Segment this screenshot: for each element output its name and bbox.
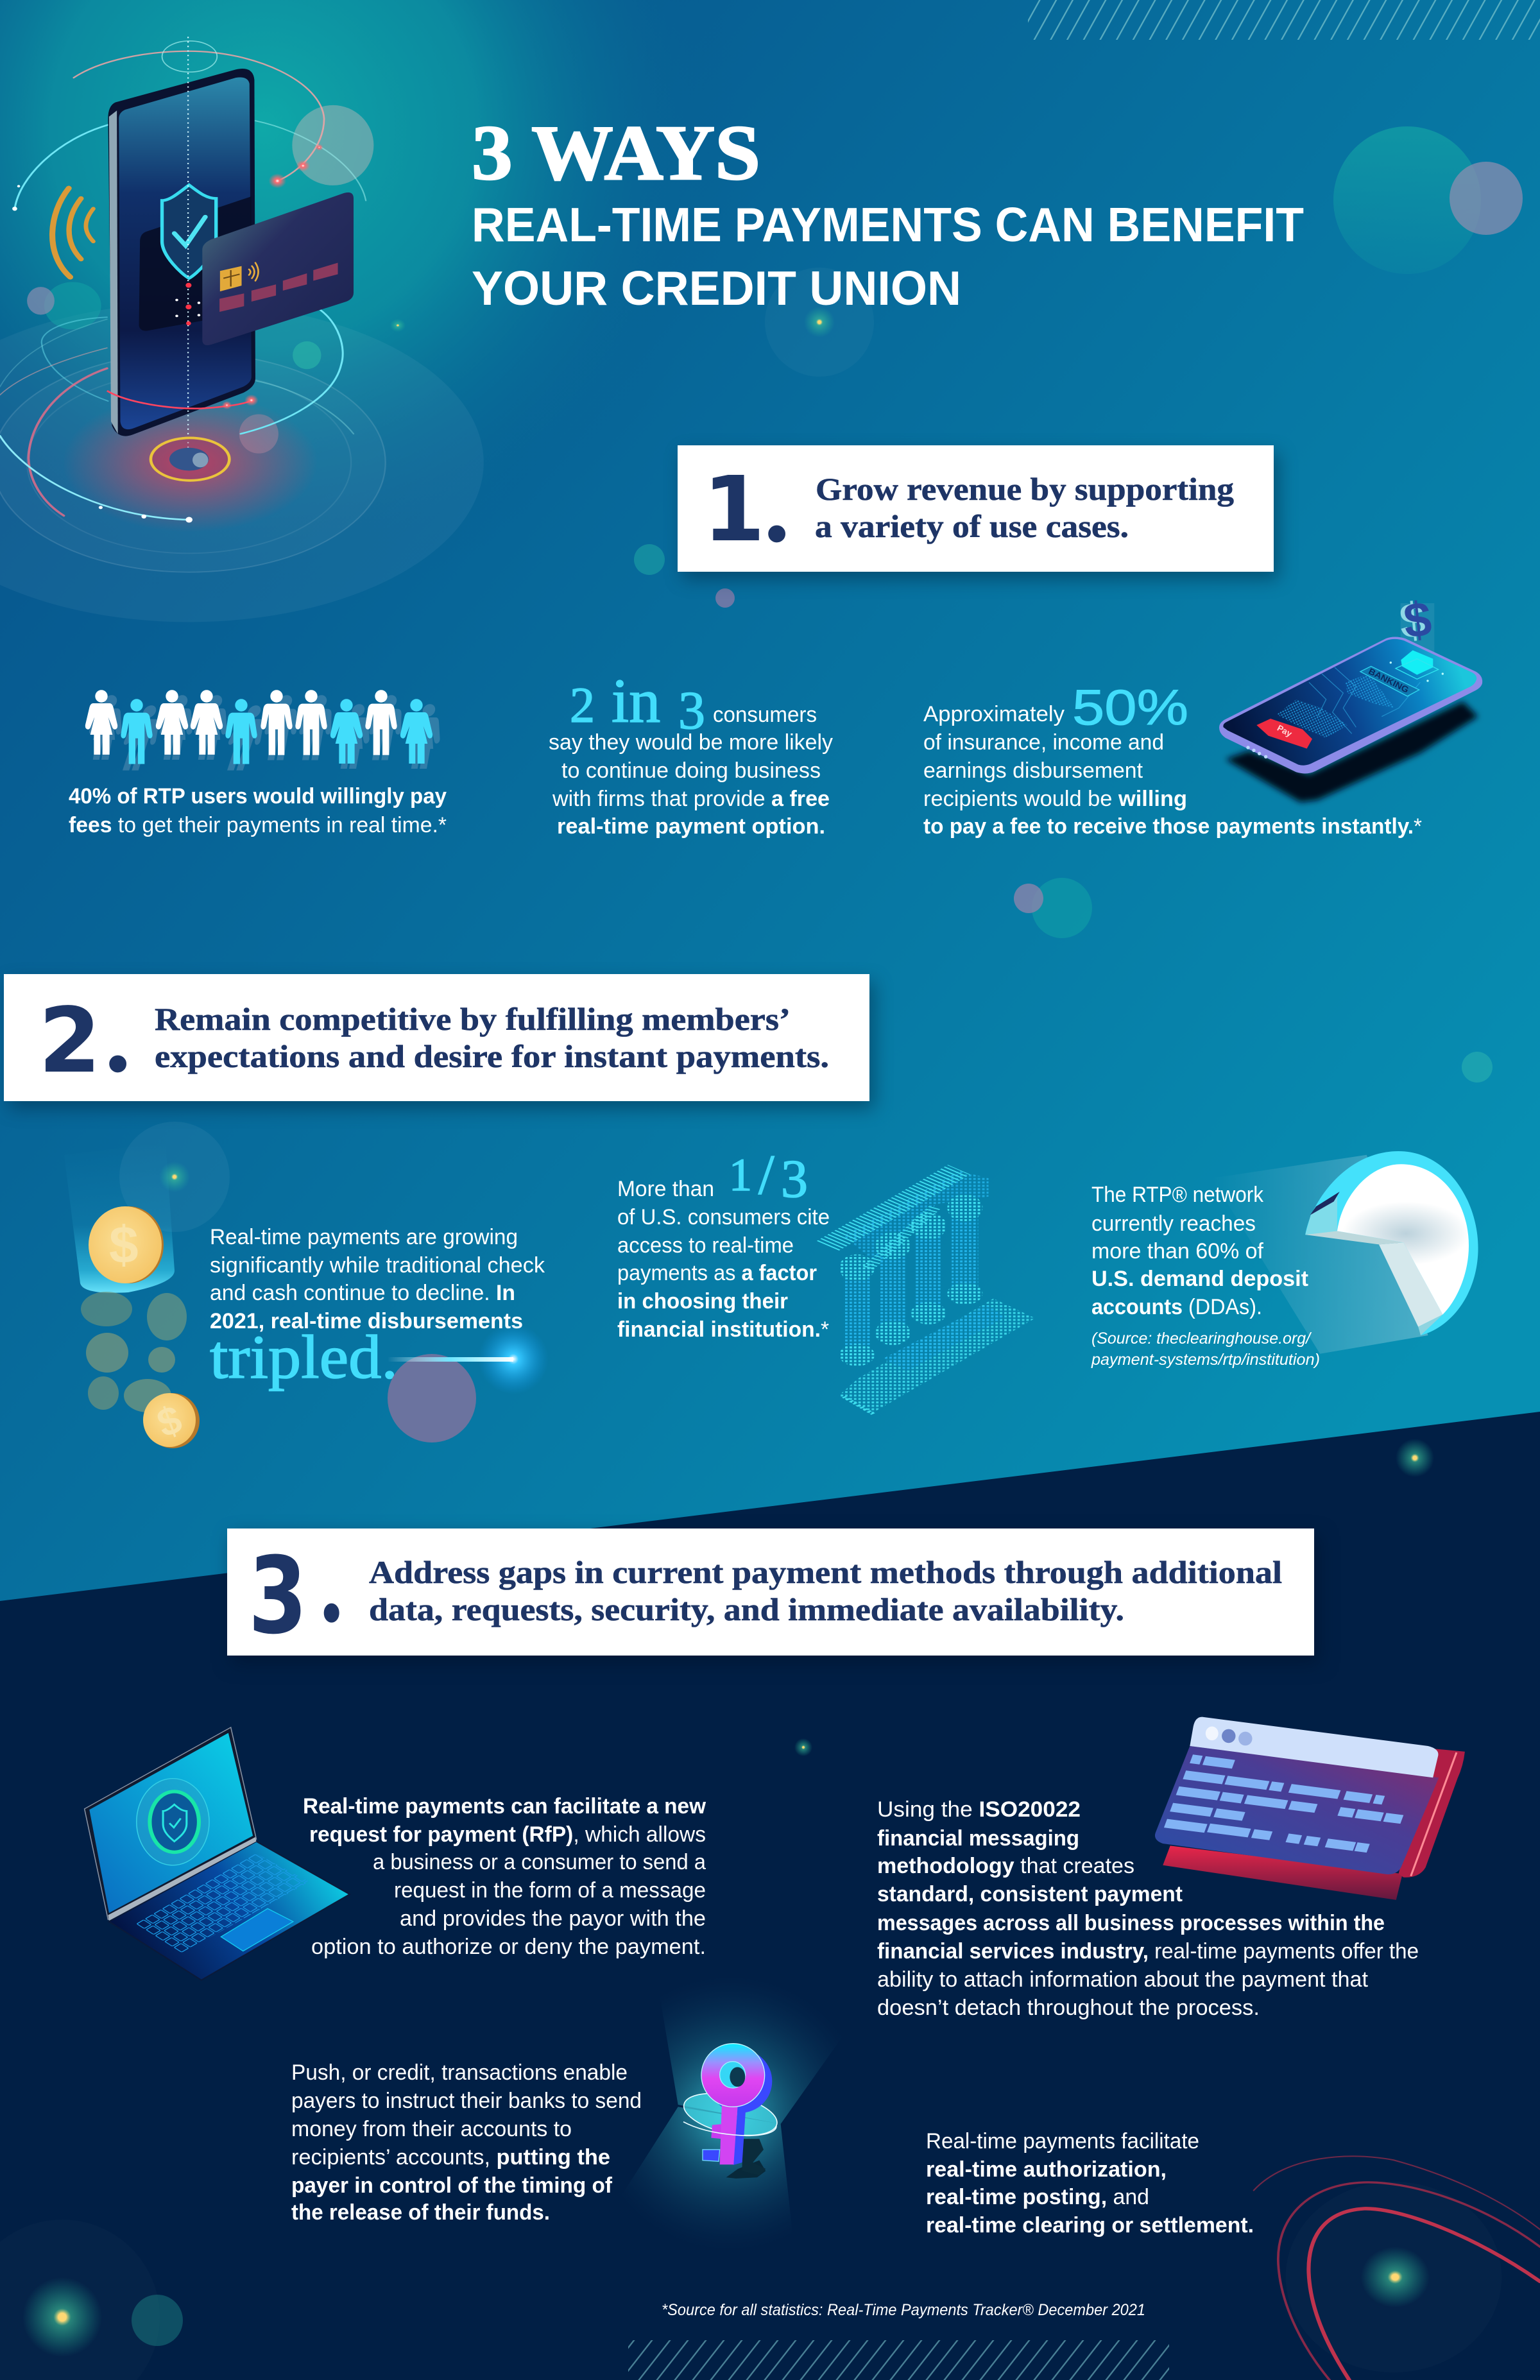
- text: real-time authorization: [926, 2129, 1254, 2238]
- bokeh: glow on dark band: [1396, 1439, 1434, 1477]
- number 2: .: [105, 977, 131, 1094]
- text: request for payment: Real-time payments can facilitate a new: [303, 1794, 706, 1819]
- text: push credit transactions: payer in control of the timing of: [291, 2173, 613, 2198]
- illustration: 3D pie chart showing 60 percent: [1212, 1151, 1478, 1354]
- source note: (Source: theclearinghouse.org/: [1091, 1330, 1312, 1348]
- stat: 40% of RTP users: [69, 784, 447, 837]
- text: push credit transactions: payers to instruct their banks to send: [291, 2089, 642, 2113]
- illustration: isometric phone with banking screen: Pay: [1276, 723, 1294, 739]
- text: ISO20022 messaging: methodology that creates: [877, 1854, 1134, 1878]
- bokeh: glow below title: [765, 268, 874, 377]
- panel: section 1 heading box: [678, 445, 1274, 572]
- bokeh: purple circle and light streak: [388, 1324, 549, 1443]
- text: ISO20022 messaging: Using the ISO20022: [877, 1797, 1081, 1822]
- panel: section 2 heading box: [4, 974, 869, 1101]
- stat: real-time payments growth tripled: [210, 1225, 545, 1391]
- stat: approximately 50%: recipients would be willing: [923, 787, 1187, 811]
- text: request for payment: and provides the payor with the: [400, 1906, 706, 1931]
- text: real-time authorization: real-time authorization,: [926, 2157, 1167, 2182]
- stat: more than 1/3: /: [758, 1144, 774, 1206]
- section 2 heading text: expectations and desire for instant payments.: [155, 1038, 829, 1074]
- stat: more than 1/3: 3: [781, 1149, 808, 1209]
- stat: more than 1/3: 1: [729, 1149, 752, 1201]
- source footnote: *Source for all statistics: Real-Time Payments Tracker® December 2021: [662, 2301, 1145, 2319]
- text: ISO20022 messaging: [877, 1797, 1419, 2020]
- title: [472, 110, 1304, 315]
- text: ISO20022 messaging: financial services industry, real-time payments offer the: [877, 1939, 1419, 1964]
- section 1 heading text: Grow revenue by supporting: [816, 471, 1234, 507]
- title line 3: YOUR CREDIT UNION: [472, 261, 961, 315]
- stat: more than 1/3: of U.S. consumers cite: [617, 1205, 830, 1229]
- section 2 heading text: [155, 1001, 829, 1074]
- illustration: isometric phone with banking screen: $: [1401, 592, 1434, 649]
- source note: [1091, 1330, 1320, 1369]
- stat: 40% of RTP users: fees to get their payments in real time.*: [69, 813, 447, 837]
- illustration: smartphone with shield and credit card: [0, 37, 484, 622]
- stat: real-time payments growth tripled: 2021, real-time disbursements: [210, 1309, 523, 1333]
- illustration: laptop with shield: [85, 1727, 350, 1980]
- stat: approximately 50%: earnings disbursement: [923, 758, 1143, 783]
- source note: payment-systems/rtp/institution): [1091, 1351, 1320, 1369]
- illustration: browser window with code bars: [1155, 1717, 1465, 1900]
- text: push credit transactions: Push, or credit, transactions enable: [291, 2060, 628, 2085]
- section 3 heading text: data, requests, security, and immediate availability.: [369, 1591, 1124, 1627]
- stat: real-time payments growth tripled: tripled.: [210, 1323, 398, 1391]
- number 3: .: [320, 1516, 343, 1647]
- title line 2: REAL-TIME PAYMENTS CAN BENEFIT: [472, 198, 1304, 252]
- text: push credit transactions: recipients’ accounts, putting the: [291, 2145, 610, 2170]
- stat: RTP network reach: accounts (DDAs).: [1091, 1295, 1262, 1319]
- stat: more than 1/3: [617, 1144, 830, 1342]
- bokeh: small glow: [794, 1738, 812, 1756]
- stat: more than 1/3: More than: [617, 1177, 714, 1201]
- text: push credit transactions: [291, 2060, 642, 2225]
- text: request for payment: a business or a consumer to send a: [373, 1850, 706, 1874]
- text: push credit transactions: money from their accounts to: [291, 2117, 572, 2141]
- stat: more than 1/3: payments as a factor: [617, 1261, 817, 1285]
- text: request for payment: request in the form of a message: [394, 1878, 706, 1903]
- illustration: isometric phone with banking screen: BANKING: [1367, 666, 1410, 695]
- stat: real-time payments growth tripled: Real-time payments are growing: [210, 1225, 518, 1249]
- section 2 heading text: Remain competitive by fulfilling members’: [155, 1001, 791, 1037]
- stat: real-time payments growth tripled: and cash continue to decline. In: [210, 1281, 515, 1305]
- number 2: 2: [38, 989, 101, 1093]
- stat: more than 1/3: access to real-time: [617, 1233, 794, 1258]
- bokeh: circles mid page: [1014, 878, 1493, 1083]
- section 3 heading text: Address gaps in current payment methods through additional: [369, 1554, 1282, 1590]
- text: real-time authorization: Real-time payments facilitate: [926, 2129, 1199, 2153]
- number 1: 1: [703, 458, 765, 562]
- stat: 2 in 3 consumers: 3: [678, 681, 705, 741]
- bokeh: glow above coins: [119, 1122, 230, 1232]
- illustration: isometric phone with banking screen: $: [1397, 592, 1430, 649]
- text: real-time authorization: real-time posting, and: [926, 2185, 1149, 2209]
- illustration: dotted bank columns: [828, 1170, 1035, 1414]
- text: ISO20022 messaging: doesn’t detach throughout the process.: [877, 1996, 1260, 2020]
- stat: more than 1/3: in choosing their: [617, 1289, 788, 1314]
- stat: 2 in 3 consumers: with firms that provide a free: [552, 787, 830, 811]
- section 3 heading text: [369, 1554, 1282, 1627]
- icon: row of ten people: [84, 690, 446, 771]
- text: ISO20022 messaging: financial messaging: [877, 1826, 1079, 1851]
- stat: 2 in 3 consumers: real-time payment option.: [557, 814, 825, 839]
- section 1 heading text: [815, 471, 1234, 544]
- text: ISO20022 messaging: standard, consistent payment: [877, 1882, 1183, 1906]
- bokeh: top right circles: [1333, 126, 1523, 274]
- stat: 2 in 3 consumers: consumers: [713, 703, 817, 727]
- stat: RTP network reach: more than 60% of: [1091, 1239, 1264, 1263]
- bokeh: green glow bottom left: [0, 2220, 183, 2380]
- stat: 40% of RTP users: 40% of RTP users would willingly pay: [69, 784, 447, 809]
- text: ISO20022 messaging: messages across all business processes within the: [877, 1911, 1385, 1935]
- illustration: glowing key with light cone: [589, 1951, 853, 2299]
- text: ISO20022 messaging: ability to attach information about the payment that: [877, 1967, 1369, 1992]
- illustration: falling gold coins: $: [109, 1216, 139, 1274]
- stat: RTP network reach: U.S. demand deposit: [1091, 1267, 1308, 1291]
- title line: 3 WAYS: 3 WAYS: [472, 110, 760, 196]
- number 3: 3: [248, 1535, 307, 1658]
- stat: 2 in 3 consumers: in: [612, 667, 676, 736]
- text: request for payment: option to authorize or deny the payment.: [311, 1935, 706, 1959]
- bokeh: circles by section 1: [634, 544, 735, 608]
- stat: RTP network reach: [1091, 1183, 1320, 1369]
- stat: approximately 50%: 50%: [1072, 679, 1188, 735]
- text: real-time authorization: real-time clearing or settlement.: [926, 2213, 1254, 2238]
- stat: approximately 50%: of insurance, income and: [923, 730, 1164, 755]
- stat: 2 in 3 consumers: to continue doing business: [561, 758, 821, 783]
- number 1: .: [764, 447, 790, 564]
- stat: 2 in 3 consumers: 2: [570, 677, 607, 733]
- stat: RTP network reach: The RTP® network: [1091, 1183, 1264, 1207]
- text: request for payment: request for payment (RfP), which allows: [309, 1822, 706, 1847]
- stat: real-time payments growth tripled: significantly while traditional check: [210, 1253, 545, 1278]
- stat: RTP network reach: currently reaches: [1091, 1211, 1256, 1236]
- text: request for payment: [303, 1794, 706, 1959]
- stat: approximately 50%: to pay a fee to receive those payments instantly.*: [923, 814, 1422, 839]
- illustration: falling gold coins: $: [151, 1397, 187, 1446]
- stat: approximately 50%: Approximately: [923, 702, 1065, 726]
- stat: more than 1/3: financial institution.*: [617, 1317, 829, 1342]
- illustration: isometric phone with banking screen: [1219, 592, 1482, 802]
- stat: 2 in 3 consumers: [549, 667, 833, 839]
- illustration: falling gold coins: [64, 1142, 200, 1448]
- stat: 2 in 3 consumers: say they would be more likely: [549, 730, 833, 755]
- decoration: red arcs with green glow bottom right: [1254, 2156, 1540, 2380]
- section 1 heading text: a variety of use cases.: [815, 508, 1129, 544]
- stat: approximately 50%: [923, 679, 1422, 839]
- panel: section 3 heading box: [227, 1516, 1314, 1658]
- text: push credit transactions: the release of their funds.: [291, 2200, 550, 2225]
